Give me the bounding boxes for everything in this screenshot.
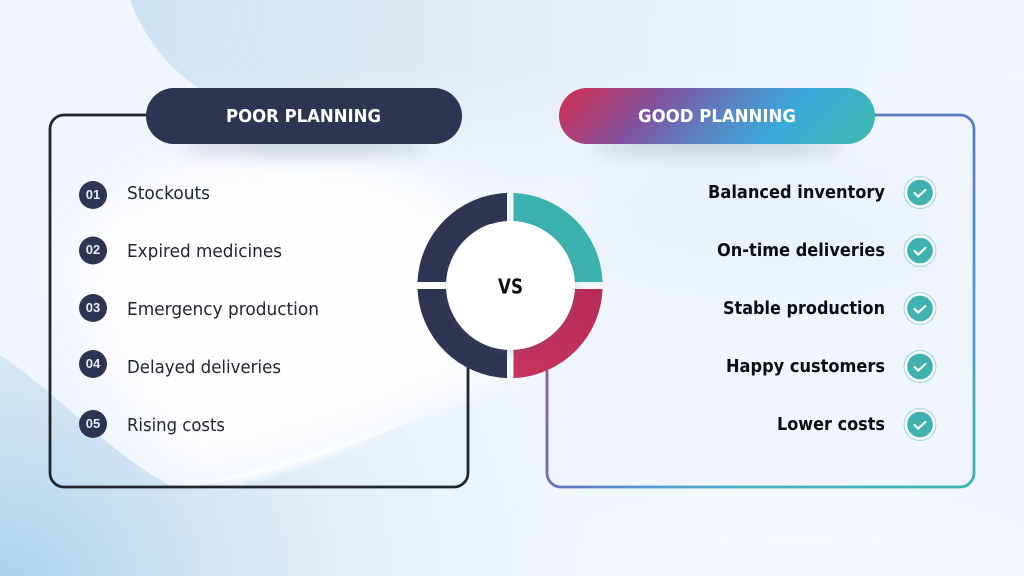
- vs label: VS: [498, 274, 523, 298]
- heading shadow: poor planning: [179, 138, 429, 154]
- item 02: 02: [86, 242, 100, 257]
- background with soft waves: [0, 0, 690, 576]
- item: balanced inventory: Balanced inventory: [708, 183, 886, 203]
- item: stable production: Stable production: [723, 299, 885, 319]
- item 05: Rising costs: [127, 416, 225, 436]
- item: balanced inventory: [708, 176, 936, 208]
- item 05: 05: [86, 416, 100, 431]
- item 02: Expired medicines: [127, 242, 282, 262]
- item 05: [79, 410, 225, 438]
- segment: bottom right: [514, 289, 603, 378]
- centre circle: [446, 221, 575, 350]
- heading: poor planning: POOR PLANNING: [226, 107, 381, 127]
- panel: good planning frame: [547, 115, 974, 487]
- item 02: [79, 236, 282, 264]
- list: poor planning items: [79, 181, 319, 438]
- chart: vs donut: [418, 193, 603, 378]
- heading: poor planning: [146, 88, 462, 144]
- item 01: 01: [86, 187, 100, 202]
- item 03: 03: [86, 300, 100, 315]
- list: good planning items: [708, 176, 936, 440]
- segment: bottom left: [418, 289, 507, 378]
- heading: good planning: [559, 88, 875, 144]
- item 03: Emergency production: [127, 300, 319, 320]
- item 04: Delayed deliveries: [127, 358, 281, 378]
- item 01: Stockouts: [127, 184, 210, 204]
- item: happy customers: Happy customers: [726, 357, 885, 377]
- item 03: [79, 294, 319, 322]
- heading: good planning: GOOD PLANNING: [638, 107, 796, 127]
- item: on-time deliveries: [717, 234, 936, 266]
- heading shadow: good planning: [592, 138, 842, 154]
- item 01: [79, 181, 210, 209]
- item: happy customers: [726, 350, 936, 382]
- item: stable production: [723, 292, 936, 324]
- item: on-time deliveries: On-time deliveries: [717, 241, 885, 261]
- item 04: 04: [86, 356, 101, 371]
- item: lower costs: Lower costs: [777, 415, 885, 435]
- segment: top left: [418, 193, 507, 282]
- item 04: [79, 350, 281, 378]
- segment: top right: [514, 193, 603, 282]
- item: lower costs: [777, 408, 936, 440]
- panel: poor planning frame: [50, 115, 468, 487]
